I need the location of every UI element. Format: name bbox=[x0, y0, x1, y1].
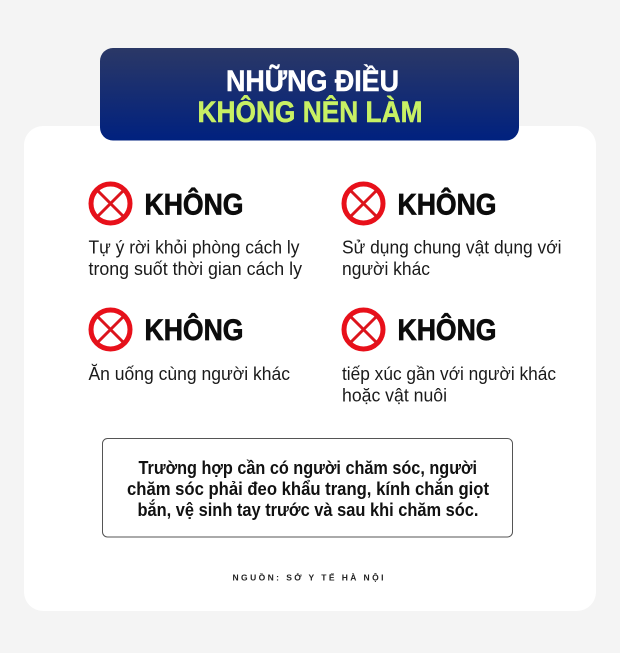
description: Sử dụng chung vật dụng với bbox=[342, 238, 562, 258]
description: tiếp xúc gần với người khác bbox=[342, 364, 556, 384]
title line 1: NHỮNG ĐIỀU bbox=[226, 64, 399, 98]
callout text: Trường hợp cần có người chăm sóc, người bbox=[138, 458, 477, 478]
title banner bbox=[100, 48, 519, 140]
heading: KHÔNG bbox=[398, 188, 496, 222]
title line 2: KHÔNG NÊN LÀM bbox=[198, 95, 422, 129]
callout box bbox=[102, 438, 512, 537]
description: Tự ý rời khỏi phòng cách ly bbox=[88, 238, 300, 258]
description bbox=[342, 238, 562, 279]
heading: KHÔNG bbox=[398, 313, 496, 347]
icon: prohibited bbox=[344, 310, 383, 349]
item: leaving the room bbox=[88, 184, 302, 279]
item: eating together bbox=[88, 310, 290, 384]
description: trong suốt thời gian cách ly bbox=[88, 259, 302, 279]
callout text: bắn, vệ sinh tay trước và sau khi chăm sóc. bbox=[138, 499, 478, 520]
heading: KHÔNG bbox=[144, 313, 244, 347]
icon: prohibited bbox=[91, 310, 130, 349]
description: người khác bbox=[342, 259, 430, 279]
description bbox=[342, 364, 556, 406]
item: sharing items bbox=[342, 184, 562, 279]
description bbox=[88, 238, 302, 279]
icon: prohibited bbox=[344, 184, 383, 223]
white panel bbox=[24, 126, 596, 611]
description: Ăn uống cùng người khác bbox=[88, 364, 290, 384]
description: hoặc vật nuôi bbox=[342, 386, 447, 406]
item: close contact bbox=[342, 310, 556, 406]
heading: KHÔNG bbox=[144, 188, 244, 222]
source: NGUỒN: SỞ Y TẾ HÀ NỘI bbox=[232, 572, 384, 582]
callout text: chăm sóc phải đeo khẩu trang, kính chắn giọt bbox=[127, 478, 489, 499]
callout text bbox=[127, 458, 489, 520]
icon: prohibited bbox=[91, 184, 130, 223]
